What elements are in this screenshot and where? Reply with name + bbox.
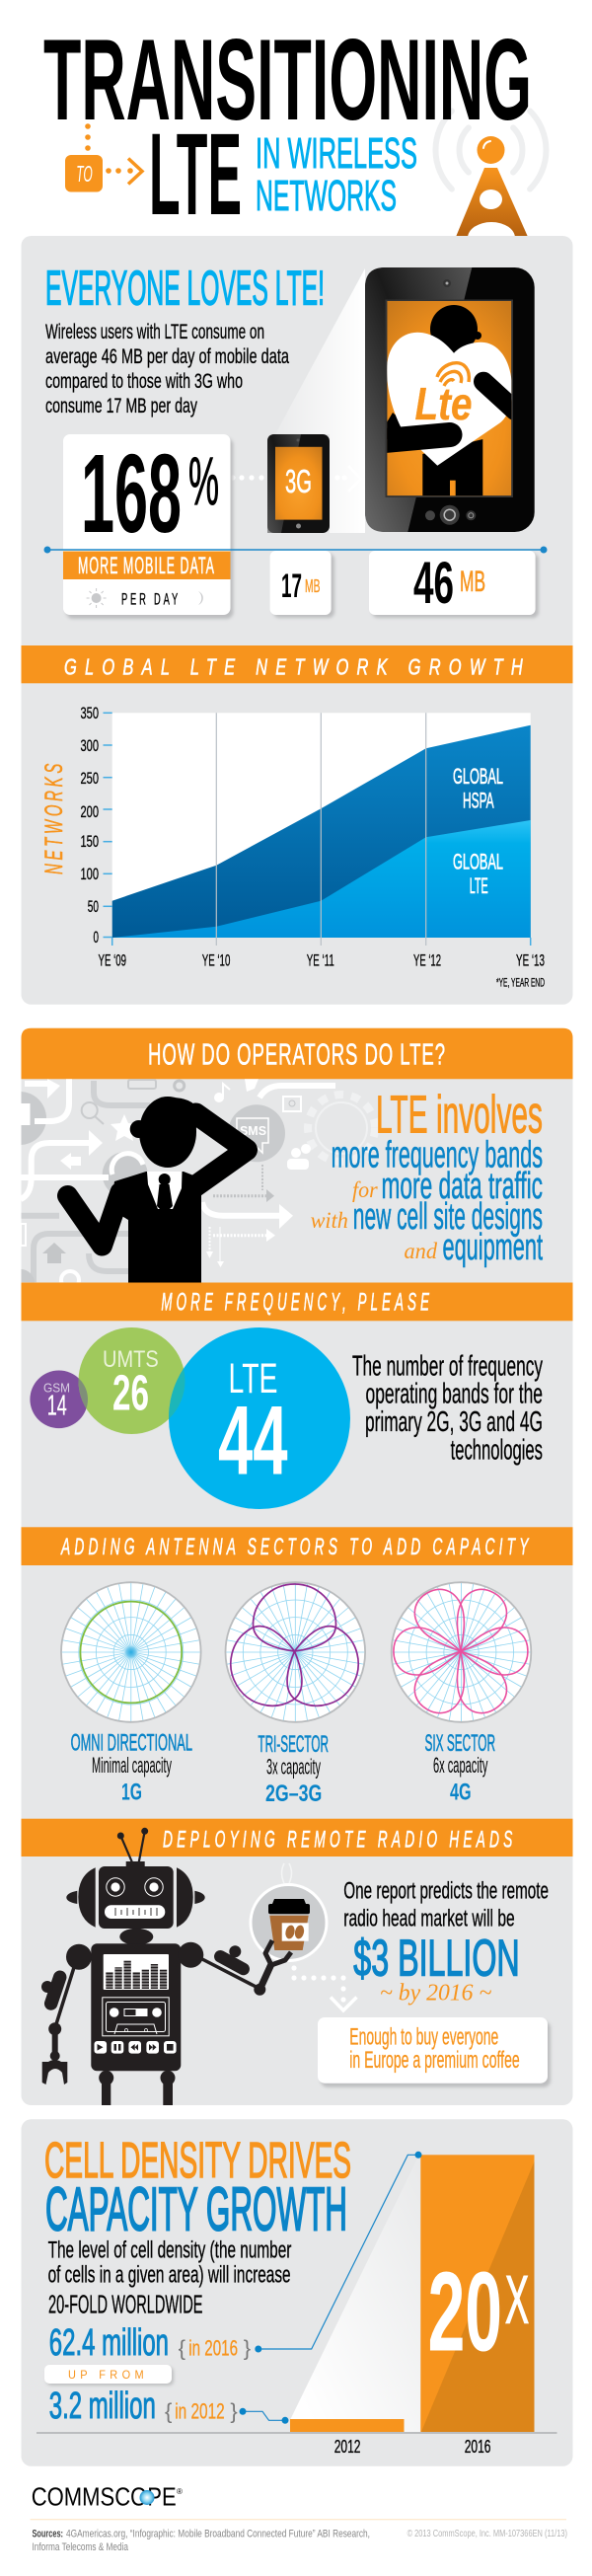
- x axis labels: YE ‘09: [99, 950, 126, 969]
- text block: usage description: average 46 MB per day of mobile data: [45, 344, 289, 368]
- heading: cell density: CELL DENSITY DRIVES: [44, 2132, 351, 2188]
- y axis labels: 300: [81, 736, 99, 755]
- stat: 3.2 million in 2012: 3.2 million: [49, 2386, 156, 2427]
- series label: global HSPA: GLOBAL: [453, 764, 503, 789]
- icon: large LTE tablet: [365, 267, 535, 532]
- text: LTE: [149, 110, 242, 240]
- bubble: UMTS 26: UMTS: [103, 1346, 159, 1373]
- icon: small 3G phone: [267, 434, 330, 533]
- heading band: more frequency please: [22, 1283, 572, 1321]
- LTE logo: Lte: [414, 378, 472, 429]
- logo: CommScope: COMMSCOPE: [32, 2481, 177, 2511]
- footer: sources: Sources:: [32, 2529, 63, 2540]
- footer: sources: Informa Telecoms & Media: [32, 2541, 129, 2553]
- diagram: omni directional: [61, 1582, 201, 1722]
- bubble chart: frequency bands: [30, 1327, 350, 1509]
- footer: sources: 4GAmericas.org, “Infographic: Mobile Broadband Connected Future” ABI Research,: [66, 2529, 370, 2540]
- label: six sector: [424, 1730, 495, 1805]
- text block: cell density description: The level of cell density (the number: [48, 2237, 291, 2264]
- callout: premium coffee: [318, 2017, 551, 2087]
- text block: cell density description: of cells in a given area) will increase: [48, 2262, 291, 2289]
- heading band: how do operators do LTE: [22, 1028, 572, 1079]
- series label: global LTE: LTE: [470, 873, 488, 898]
- x axis labels: YE ‘12: [413, 950, 441, 969]
- divider line with endpoints: [43, 547, 547, 553]
- x axis labels: [99, 950, 545, 969]
- robot left arm: [41, 1967, 74, 2084]
- text block: cell density description: [48, 2237, 291, 2318]
- logo: CommScope: ®: [177, 2487, 183, 2496]
- light beam to 2016 bar: [290, 2157, 420, 2432]
- bubble: LTE 44: 44: [218, 1385, 288, 1494]
- callout: 168 percent more mobile data: MORE MOBILE DATA: [78, 553, 215, 579]
- text block: frequency bands description: [352, 1350, 543, 1466]
- series label: global HSPA: HSPA: [463, 788, 494, 812]
- text block: LTE involves: and: [405, 1239, 437, 1263]
- stat: 46 MB: 46: [413, 550, 454, 616]
- callout: 168 percent more mobile data: %: [188, 443, 219, 519]
- stat: 3.2 million in 2012: }: [230, 2399, 238, 2424]
- label: omni directional: Minimal capacity: [92, 1753, 172, 1778]
- equalizer screen: [104, 1954, 169, 1990]
- text block: usage description: compared to those with 3G who: [45, 369, 243, 393]
- label: six sector: 6x capacity: [433, 1753, 487, 1778]
- label: omni directional: OMNI DIRECTIONAL: [71, 1729, 192, 1756]
- stat: 17 MB: [270, 551, 334, 618]
- series label: global LTE: [453, 850, 503, 898]
- bubble: UMTS 26: [79, 1327, 184, 1434]
- area: global LTE: [112, 820, 531, 938]
- y axis labels: 150: [81, 832, 99, 851]
- panel: how do operators do LTE: [0, 1028, 572, 2105]
- stat: 62.4 million in 2016: in 2016: [188, 2336, 238, 2361]
- label: up from: [44, 2365, 174, 2386]
- connector: 2016 callout line: [255, 2152, 422, 2353]
- label: tri-sector: 2G–3G: [265, 1780, 322, 1807]
- area: global HSPA: [112, 725, 531, 938]
- heading: everyone loves LTE: EVERYONE LOVES LTE!: [45, 263, 325, 316]
- label: six sector: 4G: [450, 1779, 472, 1805]
- panel: how do operators do LTE: SIX SECTOR: [424, 1730, 495, 1757]
- antennas: [118, 1829, 147, 1862]
- axis title: networks: NETWORKS: [40, 760, 68, 874]
- bubble: LTE 44: LTE: [229, 1355, 278, 1402]
- stat: 62.4 million in 2016: {: [179, 2336, 185, 2361]
- y axis labels: 100: [81, 865, 99, 883]
- text block: LTE involves: [311, 1085, 543, 1268]
- label: up from: UP FROM: [68, 2368, 148, 2382]
- heading band: global LTE network growth: [22, 645, 572, 683]
- y axis labels: 350: [81, 704, 99, 722]
- stat: 17 MB: MB: [305, 576, 320, 596]
- chart: network growth area chart: [40, 704, 545, 989]
- icon: TO connector: TO: [76, 161, 93, 187]
- bar chart: 2012 vs 2016: 20: [428, 2250, 502, 2376]
- subtitle: in wireless networks: IN WIRELESS: [256, 129, 417, 178]
- subtitle: in wireless networks: NETWORKS: [256, 172, 397, 220]
- footer: sources: [32, 2529, 370, 2553]
- stat: 62.4 million in 2016: }: [244, 2336, 251, 2361]
- player buttons: [95, 2041, 177, 2054]
- panel: how do operators do LTE: TRI-SECTOR: [258, 1731, 329, 1758]
- bar chart: 2012 vs 2016: 2016: [465, 2437, 491, 2457]
- text block: usage description: consume 17 MB per day: [45, 394, 197, 417]
- SMS icon: [237, 1118, 268, 1153]
- bubble: LTE 44: [169, 1327, 350, 1509]
- x axis labels: YE ‘11: [307, 950, 334, 969]
- text block: remote radio head market: ~ by 2016 ~: [380, 1981, 491, 2007]
- light beam between phones: [275, 268, 365, 533]
- y axis labels: 0: [93, 928, 99, 947]
- bubble: GSM 14: [30, 1370, 88, 1428]
- callout: 168 percent more mobile data: [63, 431, 233, 619]
- text block: LTE involves: for: [352, 1177, 379, 1202]
- text block: cell density description: 20-FOLD WORLDWIDE: [48, 2289, 203, 2318]
- footnote: year end: *YE, YEAR END: [496, 975, 545, 989]
- background pattern: network icons: [22, 1079, 379, 1283]
- arrow: dots to coffee note: [291, 1965, 357, 2010]
- y axis labels: 200: [81, 802, 99, 821]
- heading band: adding antenna sectors: [22, 1527, 572, 1565]
- icon: small 3G phone: 3G: [285, 463, 312, 499]
- bar chart: 2012 vs 2016: [37, 2155, 556, 2457]
- icon: TO connector: [65, 123, 142, 191]
- callout: 168 percent more mobile data: 168: [81, 431, 182, 556]
- text block: usage description: Wireless users with LTE consume on: [45, 320, 264, 343]
- label: omni directional: 1G: [121, 1779, 142, 1805]
- x axis labels: YE ‘10: [202, 950, 230, 969]
- bubble: GSM 14: GSM: [43, 1381, 70, 1396]
- icon: robot with coffee: [41, 1829, 327, 2105]
- tablet screen illustration: [380, 301, 515, 496]
- label: tri-sector: [258, 1731, 329, 1807]
- icon: signal tower: [435, 111, 547, 254]
- icon: coffee cup: [251, 1863, 327, 1965]
- LTE logo: [415, 361, 472, 420]
- text block: usage description: [45, 320, 289, 417]
- diagram: tri-sector: [216, 1582, 373, 1722]
- bar chart: 2012 vs 2016: 2012: [334, 2437, 361, 2457]
- x axis labels: YE ‘13: [516, 950, 545, 969]
- robot body: [66, 1942, 203, 2105]
- diagram: six sector: [392, 1581, 531, 1722]
- text block: remote radio head market: [343, 1877, 549, 2007]
- connector: 2012 callout line: [239, 2408, 288, 2424]
- stat: 3.2 million in 2012: in 2012: [175, 2399, 225, 2424]
- bubble: UMTS 26: 26: [112, 1364, 149, 1420]
- stat: 17 MB: 17: [281, 568, 302, 605]
- SMS icon: SMS: [240, 1123, 266, 1138]
- series label: global LTE: GLOBAL: [453, 850, 503, 874]
- heading band: deploying remote radio heads: [22, 1819, 572, 1856]
- label: omni directional: [71, 1729, 192, 1805]
- icon: businessman scratching head: [67, 1097, 247, 1283]
- stat: 62.4 million in 2016: 62.4 million: [49, 2322, 169, 2364]
- y axis labels: 250: [81, 769, 99, 788]
- series label: global HSPA: [453, 764, 503, 812]
- panel: everyone loves LTE and network growth: [22, 236, 572, 1005]
- stat: 46 MB: [369, 550, 539, 618]
- y axis labels: 50: [88, 897, 99, 916]
- robot right arm: [202, 1945, 271, 1996]
- cassette: [103, 1998, 169, 2036]
- robot head: [66, 1861, 205, 1945]
- panel: cell density drives capacity growth: [22, 2119, 572, 2466]
- label: tri-sector: 3x capacity: [266, 1754, 321, 1779]
- callout: 168 percent more mobile data: PER DAY: [121, 590, 181, 608]
- bar chart: 2012 vs 2016: X: [505, 2261, 529, 2337]
- stat: 3.2 million in 2012: {: [165, 2399, 172, 2424]
- y axis labels: [81, 704, 99, 947]
- subtitle: in wireless networks: [256, 129, 417, 220]
- stat: 46 MB: MB: [460, 566, 485, 598]
- arrow: dots from small phone to tablet: [230, 466, 361, 492]
- text block: LTE involves: with: [311, 1208, 348, 1233]
- bubble: GSM 14: 14: [47, 1390, 67, 1421]
